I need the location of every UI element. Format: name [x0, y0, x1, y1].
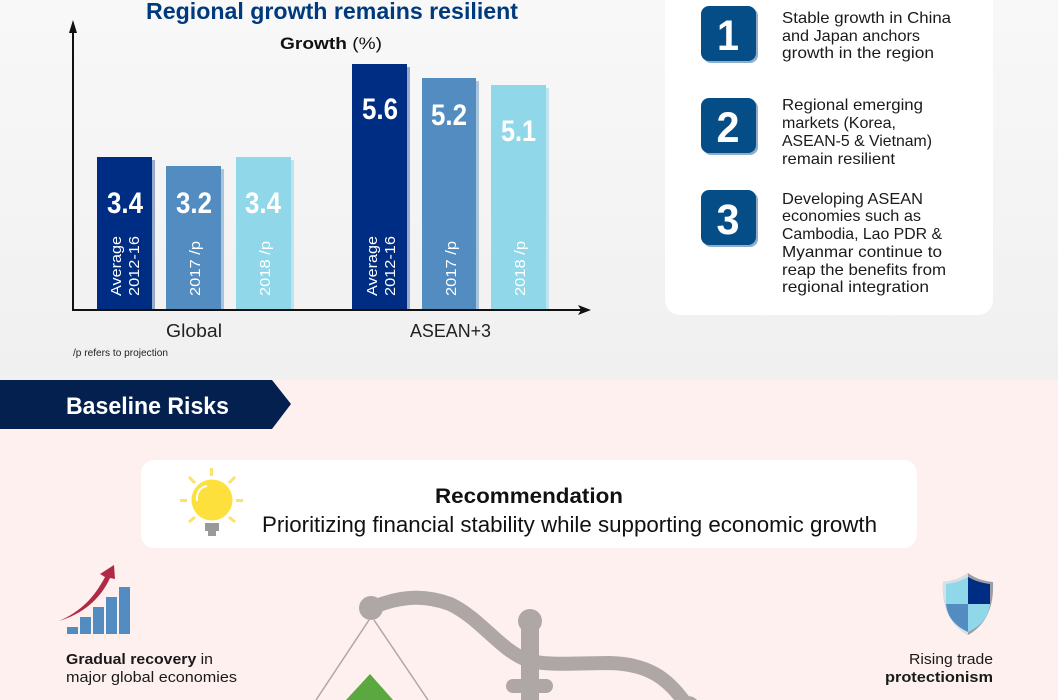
bar group: ASEAN+3: Average [364, 236, 381, 296]
bar group: ASEAN+3: 2017 /p [443, 241, 460, 296]
driver 3: Myanmar continue to [782, 244, 942, 261]
driver 3 [701, 190, 946, 296]
icon: light bulb [180, 468, 243, 536]
recommendation text: Recommendation [435, 485, 623, 508]
driver 3: Developing ASEAN [782, 191, 923, 208]
driver 2: markets (Korea, [782, 115, 896, 132]
icon: rising bars with arrow [59, 565, 130, 634]
panel: growth drivers [665, 0, 993, 315]
illustration: balance scale [316, 596, 700, 700]
recommendation text: Prioritizing financial stability while supporting economic growth [262, 512, 877, 537]
bar group: ASEAN+3: 5.6 [362, 93, 398, 126]
panel: recommendation [141, 460, 917, 548]
bar group: ASEAN+3: 5.2 [431, 99, 467, 132]
driver 2 [701, 97, 932, 168]
axes [69, 20, 591, 315]
driver 3: Cambodia, Lao PDR & [782, 226, 942, 243]
banner: Baseline Risks [0, 380, 291, 429]
driver 3: regional integration [782, 279, 929, 296]
bar group: Global: 3.4 [107, 187, 143, 220]
text: trade protectionism [885, 651, 993, 686]
driver 1: and Japan anchors [782, 28, 920, 45]
text: gradual recovery [66, 651, 237, 686]
bar group: Global: 2018 /p [257, 241, 274, 296]
bar group: Global: 3.4 [245, 187, 281, 220]
bar group: ASEAN+3: 2018 /p [512, 241, 529, 296]
text: trade protectionism: protectionism [885, 669, 993, 686]
driver 3: reap the benefits from [782, 262, 946, 279]
bar group: Global: 2017 /p [187, 241, 204, 296]
bar group: Global: Global [166, 321, 222, 341]
driver 2: ASEAN-5 & Vietnam) [782, 133, 932, 150]
recommendation text [262, 485, 877, 537]
bar group: ASEAN+3: ASEAN+3 [410, 321, 491, 341]
bar group: Global: 3.2 [176, 187, 212, 220]
driver 3: 3 [716, 196, 740, 244]
driver 2: remain resilient [782, 151, 896, 168]
text: gradual recovery: Gradual recovery in [66, 651, 213, 668]
bar group: ASEAN+3: 2012-16 [382, 236, 399, 296]
driver 1 [701, 6, 951, 63]
driver 1: Stable growth in China [782, 10, 951, 27]
bar group: Global: 2012-16 [126, 236, 143, 296]
driver 3: economies such as [782, 208, 921, 225]
driver 1: 1 [717, 12, 739, 60]
footnote: /p refers to projection [73, 348, 168, 359]
driver 1: growth in the region [782, 45, 934, 62]
text: trade protectionism: Rising trade [909, 651, 993, 668]
bar group: ASEAN+3: 5.1 [501, 115, 536, 148]
banner: Baseline Risks: Baseline Risks [66, 393, 229, 420]
bar group: Global [97, 157, 294, 341]
bar group: ASEAN+3 [352, 64, 549, 341]
bar chart: growth [69, 20, 591, 359]
driver 2: 2 [716, 104, 740, 152]
chart heading: Growth (%) [280, 34, 382, 53]
bar group: Global: Average [108, 236, 125, 296]
text: gradual recovery: major global economies [66, 669, 237, 686]
driver 2: Regional emerging [782, 97, 923, 114]
icon: shield [943, 573, 993, 635]
